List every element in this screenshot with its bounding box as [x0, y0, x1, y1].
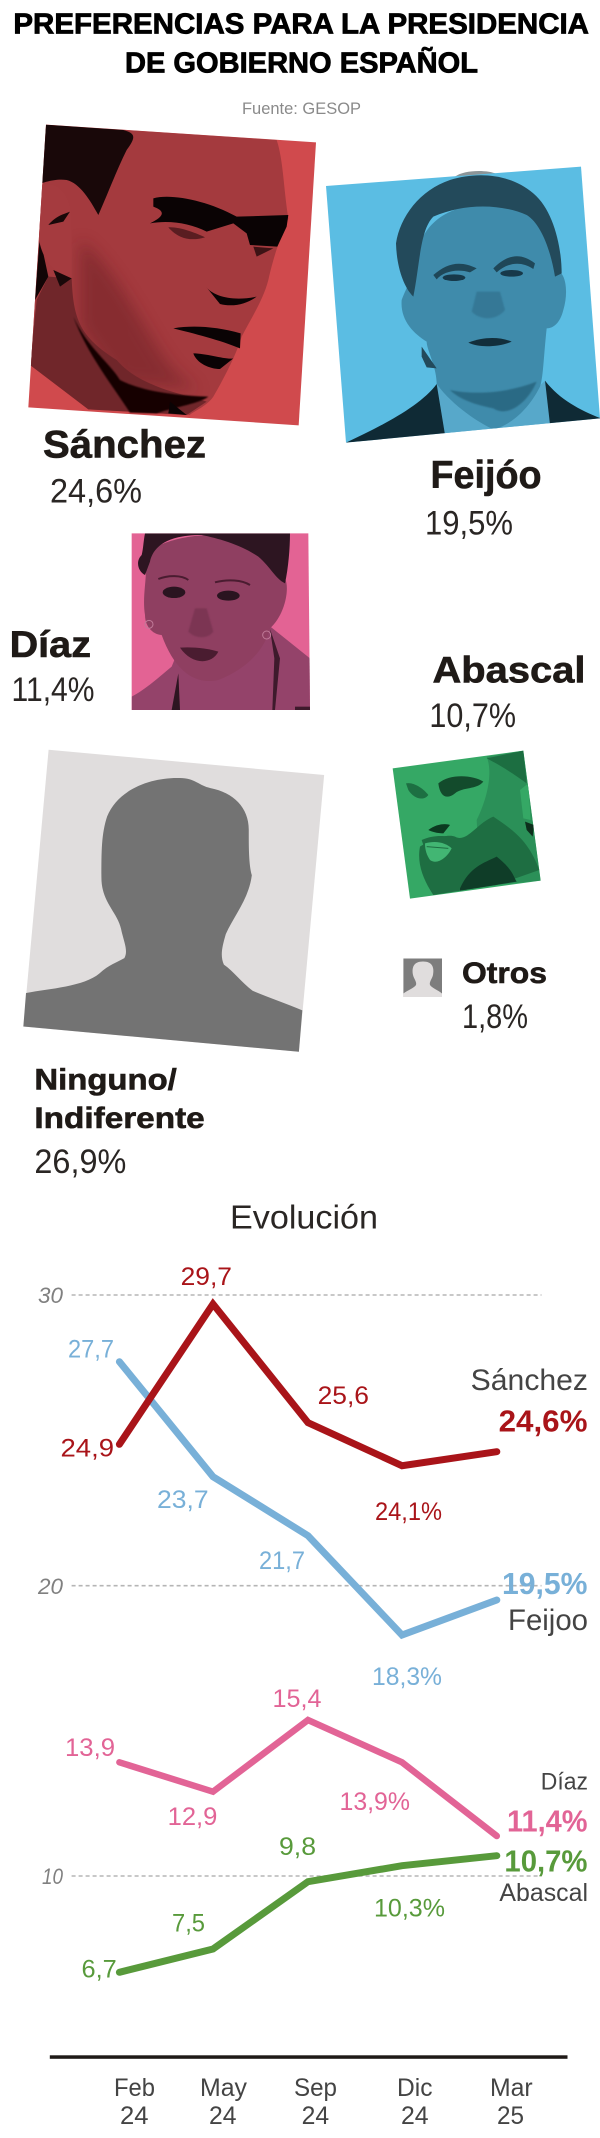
name: Feijóo: Feijóo	[430, 454, 542, 497]
name: Díaz: Díaz	[10, 624, 91, 665]
axis values: 20	[37, 1574, 64, 1599]
axis values: 30	[38, 1283, 64, 1308]
values: Feijóo: 23,7	[157, 1486, 209, 1514]
x axis: Sep	[294, 2074, 337, 2102]
name: Otros: 1,8%	[462, 998, 528, 1036]
values: Sánchez: 29,7	[181, 1263, 232, 1291]
values: Feijóo: Feijoo	[508, 1604, 588, 1637]
values: Feijóo: 27,7	[68, 1336, 114, 1364]
name: Abascal	[429, 650, 586, 735]
name: Díaz: 11,4%	[12, 671, 94, 709]
name: Abascal: Abascal	[432, 650, 586, 691]
name: Ninguno: 26,9%	[34, 1143, 126, 1181]
name: Feijóo	[425, 454, 542, 542]
x axis: 24	[120, 2102, 149, 2130]
line: Feijóo	[119, 1362, 497, 1635]
values: Díaz: 13,9%	[340, 1788, 410, 1816]
photo: Díaz	[132, 533, 310, 710]
photo: Feijóo	[326, 167, 600, 443]
values: Sánchez: 24,9	[60, 1435, 114, 1463]
x axis: 24	[302, 2102, 329, 2130]
photo: Abascal	[393, 751, 541, 899]
x axis: Feb	[114, 2074, 155, 2102]
line: Díaz	[119, 1720, 497, 1836]
values: Díaz: Díaz	[541, 1768, 588, 1795]
photo: Sánchez	[28, 125, 316, 425]
x axis: Dic	[397, 2074, 432, 2102]
line: Abascal	[119, 1856, 497, 1972]
axis values	[37, 1283, 64, 1889]
values: Sánchez: 24,1%	[375, 1498, 442, 1526]
values: Sánchez: Sánchez	[471, 1364, 588, 1397]
line: Sánchez	[119, 1304, 497, 1466]
axis values: 10	[42, 1864, 64, 1889]
x axis: May	[200, 2074, 247, 2102]
x axis: Mar	[490, 2074, 533, 2102]
name: Otros	[462, 957, 547, 1036]
values: Abascal	[82, 1833, 588, 1984]
line chart	[37, 1263, 588, 2130]
source: Fuente: GESOP	[242, 99, 361, 118]
values: Abascal: 6,7	[82, 1956, 117, 1984]
name: Sánchez: Sánchez	[43, 423, 206, 466]
values: Feijóo: 18,3%	[372, 1663, 442, 1691]
name: Otros: Otros	[462, 957, 547, 990]
title	[13, 8, 589, 80]
values: Sánchez	[60, 1263, 588, 1526]
name: Ninguno	[34, 1064, 205, 1181]
values: Díaz	[65, 1685, 588, 1839]
values: Abascal: Abascal	[499, 1879, 588, 1907]
values: Sánchez: 24,6%	[499, 1404, 588, 1439]
name: Feijóo: 19,5%	[425, 504, 513, 542]
values: Díaz: 13,9	[65, 1734, 115, 1762]
values: Abascal: 9,8	[279, 1833, 316, 1861]
values: Feijóo: 21,7	[259, 1547, 305, 1575]
x axis: 24	[401, 2102, 429, 2130]
name: Ninguno: Ninguno/	[34, 1064, 178, 1097]
values: Feijóo	[68, 1336, 588, 1691]
name: Sánchez: 24,6%	[50, 473, 142, 511]
photo: Ninguno placeholder	[23, 750, 324, 1052]
values: Sánchez: 25,6	[318, 1382, 369, 1410]
x axis: 25	[497, 2102, 524, 2130]
values: Díaz: 12,9	[168, 1803, 217, 1831]
icon: Otros placeholder	[403, 958, 442, 997]
values: Abascal: 7,5	[172, 1910, 205, 1938]
x axis: 24	[209, 2102, 237, 2130]
name: Ninguno: Indiferente	[34, 1102, 205, 1135]
values: Feijóo: 19,5%	[502, 1566, 588, 1601]
name: Sánchez	[43, 423, 206, 511]
values: Díaz: 11,4%	[507, 1804, 588, 1839]
values: Abascal: 10,3%	[374, 1895, 445, 1923]
title: PREFERENCIAS PARA LA PRESIDENCIA	[13, 8, 589, 40]
name: Díaz	[10, 624, 95, 709]
x axis	[50, 2055, 568, 2130]
name: Abascal: 10,7%	[429, 697, 516, 735]
values: Díaz: 15,4	[272, 1685, 322, 1713]
title: DE GOBIERNO ESPAÑOL	[125, 46, 478, 80]
values: Abascal: 10,7%	[504, 1844, 588, 1879]
heading: Evolución: Evolución	[230, 1198, 378, 1235]
